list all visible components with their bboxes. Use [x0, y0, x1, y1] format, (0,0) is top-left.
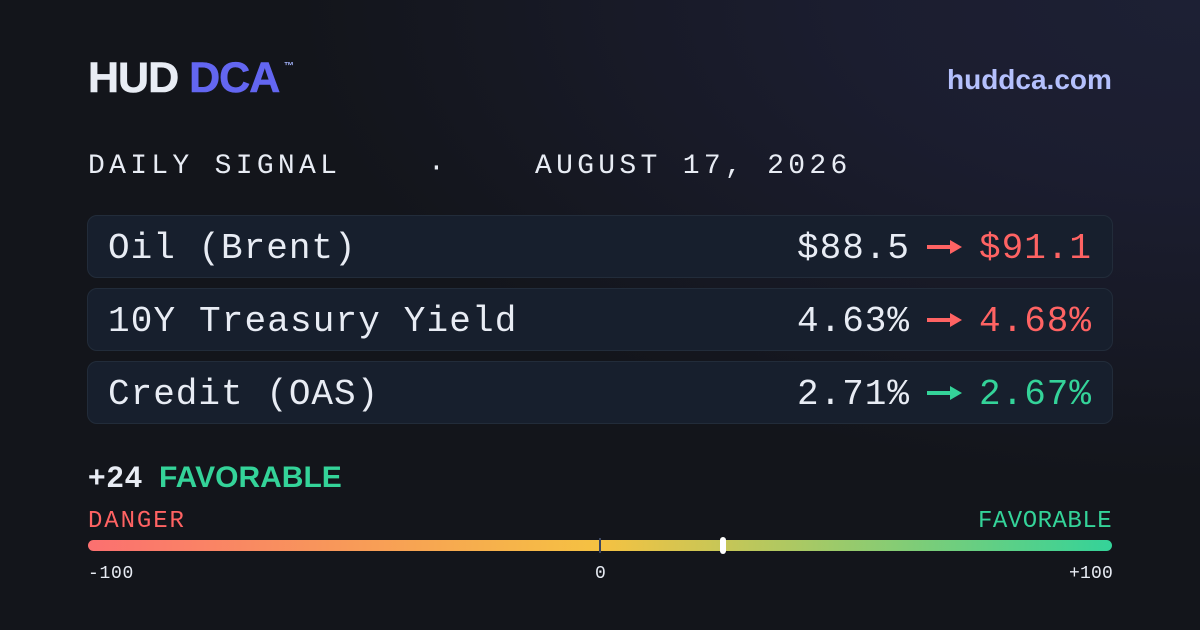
scale min: -100 [88, 564, 134, 584]
panel: oil row [87, 215, 1113, 278]
gauge bar [88, 537, 1112, 554]
oil old value: $88.5 [797, 228, 910, 269]
treasury new value: 4.68% [979, 301, 1092, 342]
gauge label: danger: DANGER [88, 508, 186, 535]
gauge marker [720, 537, 726, 554]
treasury label: 10Y Treasury Yield [108, 301, 518, 342]
zero tick [599, 538, 601, 553]
gauge label: favorable: FAVORABLE [978, 508, 1112, 535]
score heading: +24 [88, 461, 143, 494]
panel: treasury row [87, 288, 1113, 351]
credit label: Credit (OAS) [108, 374, 379, 415]
logo: ™ [284, 61, 294, 72]
credit old value: 2.71% [797, 374, 910, 415]
text: · [428, 153, 449, 184]
logo: HUD DCA [88, 54, 279, 102]
text: FAVORABLE [159, 461, 342, 494]
gauge gradient track [88, 540, 1112, 551]
credit new value: 2.67% [979, 374, 1092, 415]
scale zero: 0 [595, 564, 606, 584]
panel: credit row [87, 361, 1113, 424]
date line [88, 151, 852, 184]
icon: oil arrow [927, 240, 962, 254]
scale max: +100 [1069, 564, 1113, 584]
oil new value: $91.1 [979, 228, 1092, 269]
icon: credit arrow [927, 386, 962, 400]
score heading [88, 461, 342, 494]
oil label: Oil (Brent) [108, 228, 357, 269]
site url: huddca.com [947, 64, 1112, 95]
date line: DAILY SIGNAL [88, 151, 341, 182]
text: AUGUST 17, 2026 [535, 151, 852, 182]
treasury old value: 4.63% [797, 301, 910, 342]
icon: treasury arrow [927, 313, 962, 327]
